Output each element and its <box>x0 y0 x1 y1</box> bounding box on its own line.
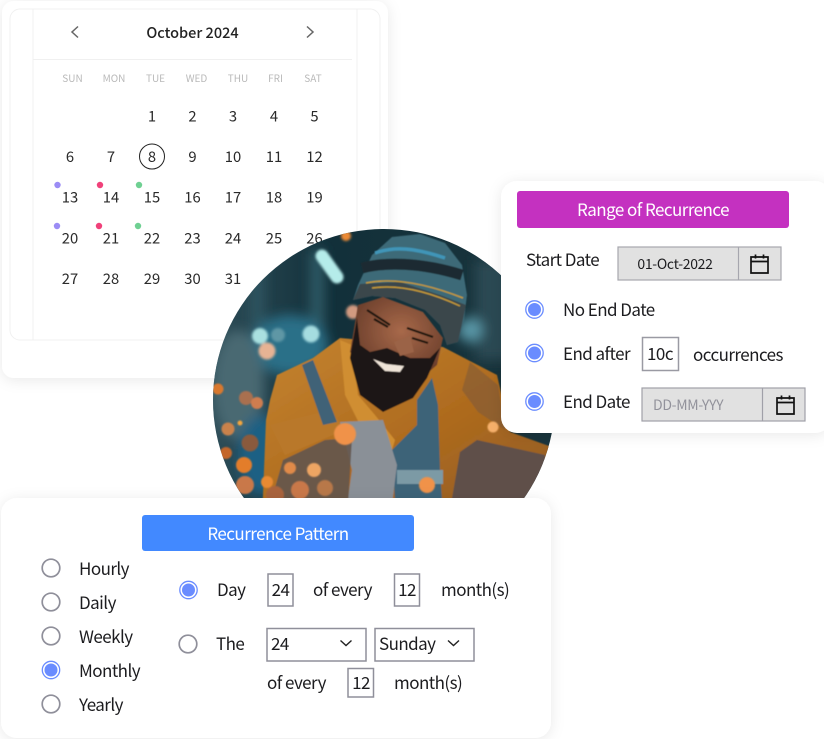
start date field <box>526 246 781 280</box>
icon: next month <box>307 26 313 38</box>
event dots <box>54 182 142 229</box>
option: end date: End Date <box>563 388 630 413</box>
calendar dates: 6 <box>66 146 74 167</box>
frequency options: Hourly <box>79 555 130 580</box>
calendar dates: 20 <box>62 228 78 248</box>
day of every month option: of every <box>313 576 373 601</box>
option: end date: DD-MM-YYY <box>653 395 724 415</box>
frequency options: Daily <box>79 589 117 614</box>
calendar dates: 13 <box>62 186 78 208</box>
heading: recurrence pattern: Recurrence Pattern <box>207 520 349 545</box>
the nth weekday option: of every <box>267 669 327 694</box>
calendar dates: 7 <box>107 146 115 167</box>
the nth weekday option: 12 <box>352 669 370 694</box>
calendar dates: 26 <box>306 228 323 248</box>
calendar dates: 28 <box>103 268 119 289</box>
calendar dates: 16 <box>184 186 201 208</box>
beard and face <box>350 296 444 371</box>
day of every month option <box>180 574 509 606</box>
weekday headers: TUE <box>146 70 165 85</box>
weekday headers <box>62 70 322 85</box>
beanie <box>354 234 468 322</box>
calendar dates: 8 <box>148 146 156 167</box>
tool and hands <box>340 420 397 505</box>
calendar dates: 27 <box>62 268 78 289</box>
calendar dates: 1 <box>148 106 156 126</box>
calendar title: October 2024 <box>146 22 239 43</box>
photo: smiling worker with sparks <box>213 229 552 498</box>
panel: recurrence pattern <box>1 498 551 738</box>
today marker <box>140 144 164 169</box>
frequency options: Yearly <box>78 691 124 716</box>
option: end after occurrences: 10c <box>647 340 674 365</box>
panel: range of recurrence <box>501 181 824 433</box>
calendar dates: 14 <box>103 186 119 208</box>
calendar dates: 29 <box>144 268 160 289</box>
the nth weekday option: 24 <box>271 630 289 655</box>
calendar dates: 25 <box>266 228 282 248</box>
calendar dates: 18 <box>266 186 282 208</box>
heading: range of recurrence: Range of Recurrence <box>577 196 729 221</box>
day of every month option: month(s) <box>441 576 509 601</box>
start date field: Start Date <box>526 246 599 271</box>
calendar dates <box>62 106 323 289</box>
start date field: 01-Oct-2022 <box>637 254 713 274</box>
jacket <box>262 337 549 498</box>
weekday headers: THU <box>228 70 248 85</box>
weekday headers: FRI <box>268 70 283 85</box>
calendar dates: 2 <box>188 106 197 126</box>
weekday headers: WED <box>186 70 207 85</box>
calendar dates: 19 <box>306 186 323 208</box>
calendar dates: 10 <box>225 146 241 167</box>
calendar dates: 21 <box>103 228 119 248</box>
option: end after occurrences: End after <box>563 340 631 365</box>
calendar dates: 9 <box>188 146 197 167</box>
option: no end date: No End Date <box>563 296 655 321</box>
the nth weekday option <box>179 628 474 697</box>
day of every month option: 24 <box>272 576 289 601</box>
calendar dates: 23 <box>184 228 201 248</box>
heading: recurrence pattern <box>142 515 414 551</box>
panel: calendar <box>2 1 388 378</box>
sparks and bokeh <box>212 384 498 504</box>
option: end date <box>526 388 805 421</box>
calendar dates: 4 <box>270 106 278 126</box>
weekday headers: SUN <box>62 70 83 85</box>
calendar dates: 3 <box>229 106 237 126</box>
the nth weekday option: month(s) <box>394 669 462 694</box>
frequency options: Monthly <box>79 657 141 682</box>
heading: range of recurrence <box>517 191 789 228</box>
frequency options <box>42 555 141 716</box>
calendar dates: 12 <box>306 146 323 167</box>
weekday headers: MON <box>103 70 125 85</box>
weekday headers: SAT <box>304 70 322 85</box>
the nth weekday option: Sunday <box>379 630 436 655</box>
calendar dates: 22 <box>144 228 160 248</box>
calendar dates: 15 <box>144 186 160 208</box>
frequency options: Weekly <box>79 623 133 648</box>
calendar dates: 5 <box>310 106 319 126</box>
the nth weekday option: The <box>216 630 244 655</box>
calendar dates: 17 <box>225 186 241 208</box>
icon: previous month <box>72 26 78 38</box>
calendar dates: 24 <box>225 228 241 248</box>
calendar dates: 11 <box>266 146 282 167</box>
calendar dates: 30 <box>184 268 201 289</box>
option: end after occurrences <box>526 338 784 370</box>
calendar dates: 31 <box>225 268 241 289</box>
option: end after occurrences: occurrences <box>693 341 784 366</box>
overalls <box>302 360 337 425</box>
day of every month option: Day <box>217 576 246 601</box>
day of every month option: 12 <box>398 576 416 601</box>
